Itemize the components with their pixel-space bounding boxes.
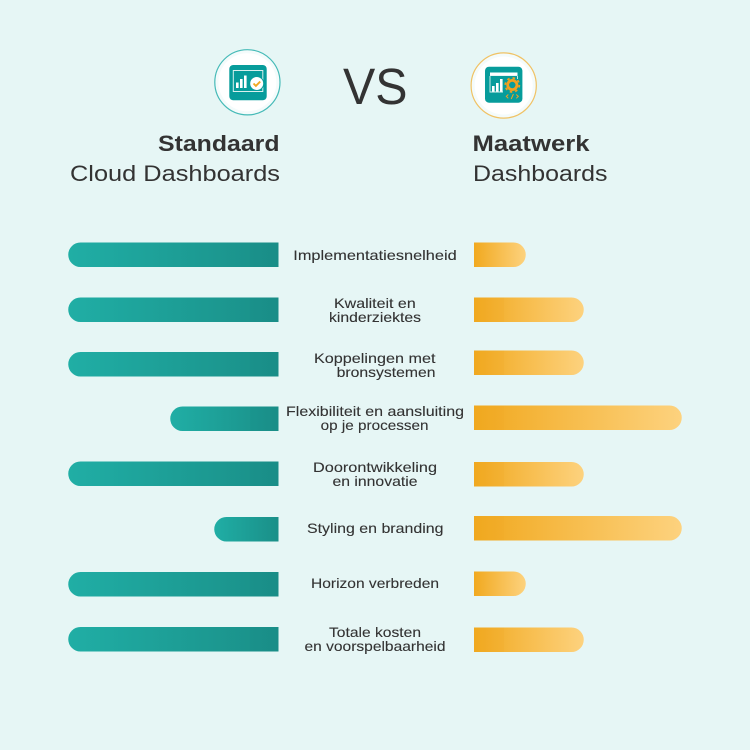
label: [304, 624, 446, 654]
label: Koppelingen met: [314, 350, 436, 366]
label: en voorspelbaarheid: [304, 638, 446, 654]
bar: custom: [474, 572, 526, 596]
label: Styling en branding: [307, 520, 444, 536]
label: Totale kosten: [329, 624, 421, 640]
icon: standard dashboard: [215, 50, 280, 115]
row: Kwaliteit en kinderziektes: [68, 295, 584, 325]
row: Doorontwikkeling en innovatie: [68, 459, 584, 489]
label: Kwaliteit en: [334, 295, 416, 311]
bar: custom: [474, 298, 584, 322]
bar: standard: [68, 242, 278, 267]
bar: standard: [68, 352, 278, 376]
bar: standard: [68, 298, 278, 322]
right column header: [471, 53, 608, 186]
label: [329, 295, 421, 325]
heading: Maatwerk Dashboards: Maatwerk: [472, 131, 590, 156]
heading: Standaard Cloud Dashboards: [70, 131, 280, 186]
label: Horizon verbreden: [311, 575, 439, 591]
row: Koppelingen met bronsystemen: [68, 350, 584, 380]
label: op je processen: [321, 417, 429, 433]
label: Flexibiliteit en aansluiting: [286, 403, 464, 419]
bar: custom: [474, 405, 682, 430]
row: Flexibiliteit en aansluiting op je processen: [170, 403, 682, 433]
bar: custom: [474, 242, 526, 267]
label: [286, 403, 464, 433]
label: [314, 350, 436, 380]
label: [313, 459, 437, 489]
bar: standard: [214, 517, 278, 542]
VS label: VS: [343, 58, 408, 115]
bar: standard: [68, 627, 278, 652]
label: bronsystemen: [337, 364, 436, 380]
heading: Standaard Cloud Dashboards: Standaard: [158, 131, 280, 156]
heading: Standaard Cloud Dashboards: Cloud Dashboards: [70, 161, 280, 186]
label: kinderziektes: [329, 309, 421, 325]
bar: custom: [474, 350, 584, 375]
heading: Maatwerk Dashboards: [472, 131, 608, 186]
label: Implementatiesnelheid: [293, 247, 457, 263]
bar: standard: [68, 572, 278, 596]
bar: custom: [474, 516, 682, 540]
bar: standard: [68, 462, 278, 486]
left column header: [70, 50, 280, 186]
row: Horizon verbreden: [68, 572, 526, 596]
row: Implementatiesnelheid: [68, 242, 526, 267]
bar: custom: [474, 462, 584, 486]
label: en innovatie: [332, 473, 418, 489]
row: Styling en branding: [214, 516, 682, 542]
row: Totale kosten en voorspelbaarheid: [68, 624, 584, 654]
icon: custom dashboard: [471, 53, 536, 118]
label: Doorontwikkeling: [313, 459, 437, 475]
bar: standard: [170, 406, 278, 431]
bar: custom: [474, 628, 584, 652]
heading: Maatwerk Dashboards: Dashboards: [473, 161, 608, 186]
